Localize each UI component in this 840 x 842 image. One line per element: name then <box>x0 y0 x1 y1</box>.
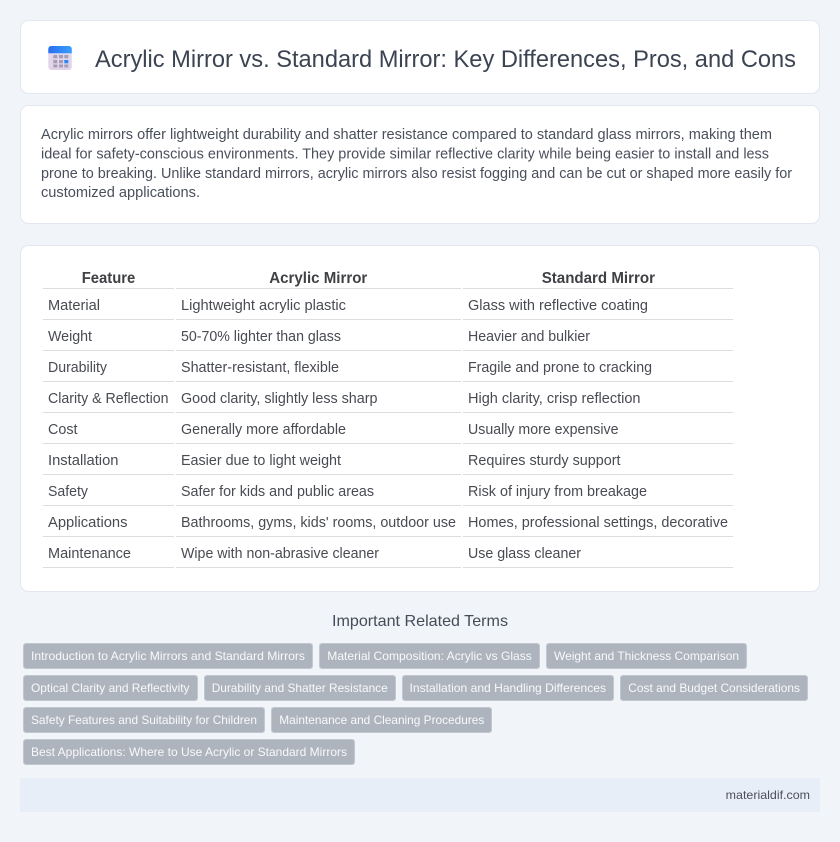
intro text block: ideal for safety-conscious environments. They provide similar reflective clarity while being easier to install and less <box>41 146 769 162</box>
tag: material composition: Material Composition: Acrylic vs Glass <box>327 649 532 663</box>
tag: durability <box>204 676 396 700</box>
tag: optical clarity: Optical Clarity and Reflectivity <box>31 681 190 695</box>
row: Material: Material <box>48 298 100 314</box>
row: Applications: Bathrooms, gyms, kids' rooms, outdoor use <box>181 515 456 531</box>
row: Applications: Applications <box>48 515 128 531</box>
panel: comparison table <box>20 246 820 592</box>
tag: installation <box>402 676 614 700</box>
row: Installation <box>48 453 620 469</box>
row: Applications <box>48 515 728 531</box>
row: Safety: Safer for kids and public areas <box>181 484 374 500</box>
panel: introduction <box>20 106 820 224</box>
table header row: Acrylic Mirror <box>269 270 367 287</box>
row: Maintenance: Maintenance <box>48 546 131 562</box>
row: Clarity and Reflection <box>48 391 640 407</box>
row: Safety: Safety <box>48 484 89 500</box>
row: Weight <box>48 329 590 345</box>
footer: materialdif.com <box>726 788 810 802</box>
row: Safety: Risk of injury from breakage <box>468 484 647 500</box>
row: Cost <box>48 422 618 438</box>
row: Cost: Usually more expensive <box>468 422 618 438</box>
table header row: Standard Mirror <box>542 270 655 287</box>
row: Clarity and Reflection: Clarity & Reflection <box>48 391 168 407</box>
tag: cost <box>620 676 808 700</box>
tag: maintenance <box>272 708 492 732</box>
row: Material <box>48 298 648 314</box>
intro text block: prone to breaking. Unlike standard mirrors, acrylic mirrors also resist fogging and can be cut or shaped more easily for <box>41 166 792 182</box>
row: Maintenance: Wipe with non-abrasive cleaner <box>181 546 379 562</box>
heading: related terms: Important Related Terms <box>332 613 508 630</box>
row: Durability: Durability <box>48 360 108 376</box>
row: Applications: Homes, professional settings, decorative <box>468 515 728 531</box>
row: Durability <box>48 360 652 376</box>
intro text block: Acrylic mirrors offer lightweight durability and shatter resistance compared to standard glass mirrors, making them <box>41 127 772 143</box>
intro text block: customized applications. <box>41 185 200 201</box>
row: Material: Glass with reflective coating <box>468 298 648 314</box>
icon: calendar grid <box>48 46 72 70</box>
tag: installation: Installation and Handling Differences <box>410 681 606 695</box>
row: Durability: Shatter-resistant, flexible <box>181 360 339 376</box>
row: Safety <box>48 484 647 500</box>
tag: durability: Durability and Shatter Resistance <box>212 681 388 695</box>
tag: introduction: Introduction to Acrylic Mirrors and Standard Mirrors <box>31 649 305 663</box>
row: Cost: Generally more affordable <box>181 422 346 438</box>
table header row <box>82 270 655 287</box>
row: Clarity and Reflection: Good clarity, slightly less sharp <box>181 391 378 407</box>
tag: safety: Safety Features and Suitability for Children <box>31 713 257 727</box>
panel: title header <box>20 20 820 94</box>
table header row: Feature <box>82 270 135 287</box>
tag: optical clarity <box>24 676 198 700</box>
tag: cost: Cost and Budget Considerations <box>628 681 800 695</box>
row: Weight: Heavier and bulkier <box>468 329 590 345</box>
tag: best applications <box>24 740 354 764</box>
title: Acrylic Mirror vs. Standard Mirror: Key Differences, Pros, and Cons <box>95 46 796 73</box>
row: Material: Lightweight acrylic plastic <box>181 298 346 314</box>
row: Weight: Weight <box>48 329 92 345</box>
row: Clarity and Reflection: High clarity, crisp reflection <box>468 391 640 407</box>
tag: material composition <box>320 644 540 668</box>
tag: weight and thickness: Weight and Thickness Comparison <box>554 649 739 663</box>
row: Maintenance: Use glass cleaner <box>468 546 581 562</box>
row: Weight: 50-70% lighter than glass <box>181 329 341 345</box>
row: Installation: Installation <box>48 453 118 469</box>
tag: safety <box>24 708 264 732</box>
intro text block <box>41 127 792 201</box>
tag: best applications: Best Applications: Where to Use Acrylic or Standard Mirrors <box>31 745 347 759</box>
row: Installation: Easier due to light weight <box>181 453 341 469</box>
tag: maintenance: Maintenance and Cleaning Procedures <box>279 713 484 727</box>
tag: introduction <box>24 644 312 668</box>
tag: weight and thickness <box>546 644 746 668</box>
related term tags <box>24 644 808 764</box>
row: Durability: Fragile and prone to cracking <box>468 360 652 376</box>
row: Cost: Cost <box>48 422 78 438</box>
row: Installation: Requires sturdy support <box>468 453 620 469</box>
row: Maintenance <box>48 546 581 562</box>
footer <box>20 778 820 812</box>
